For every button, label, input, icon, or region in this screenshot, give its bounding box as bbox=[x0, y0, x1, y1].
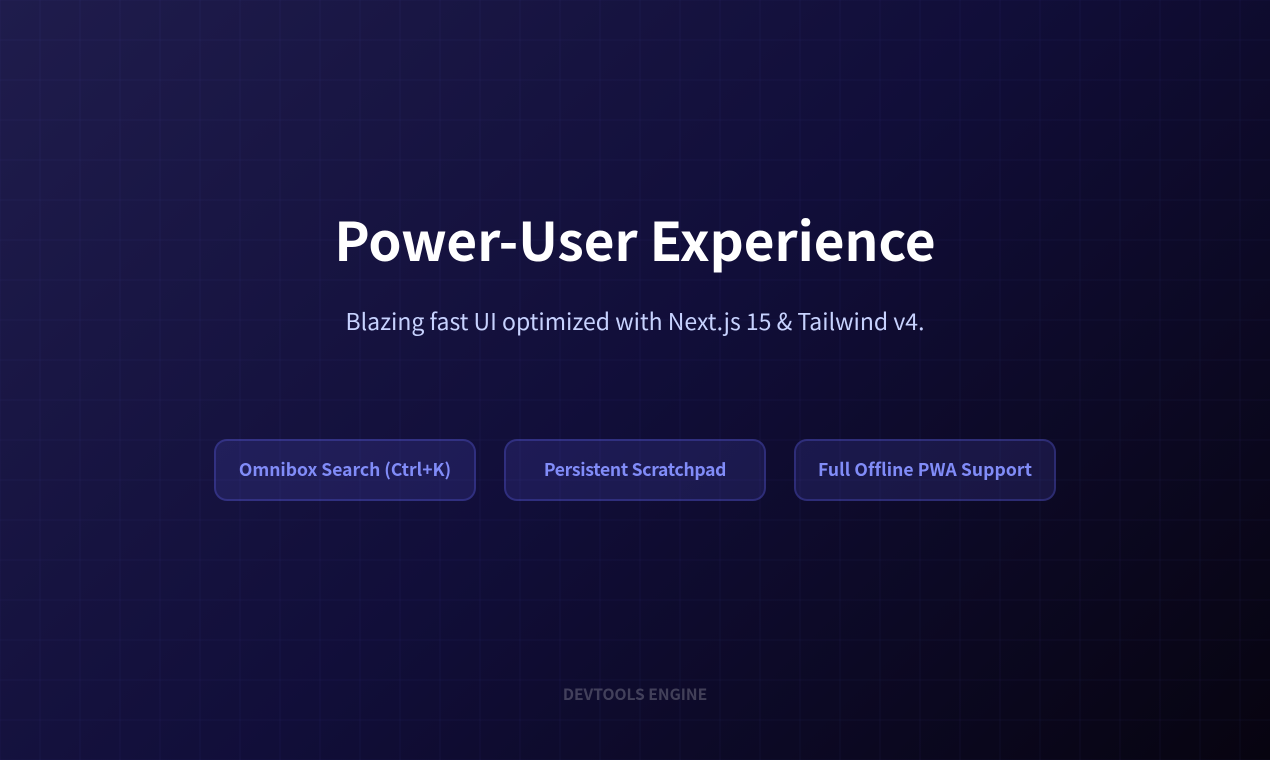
footer brand label: DEVTOOLS ENGINE bbox=[563, 683, 707, 705]
feature button: offline PWA bbox=[794, 439, 1056, 501]
title: Power-User Experience bbox=[334, 201, 936, 277]
feature button: persistent scratchpad: Persistent Scratchpad bbox=[544, 457, 726, 482]
subtitle: Blazing fast UI optimized with Next.js 15 & Tailwind v4. bbox=[346, 303, 924, 337]
feature button: omnibox search bbox=[214, 439, 476, 501]
feature button: offline PWA: Full Offline PWA Support bbox=[818, 457, 1032, 482]
feature button: persistent scratchpad bbox=[504, 439, 766, 501]
feature button: omnibox search: Omnibox Search (Ctrl+K) bbox=[239, 457, 451, 482]
